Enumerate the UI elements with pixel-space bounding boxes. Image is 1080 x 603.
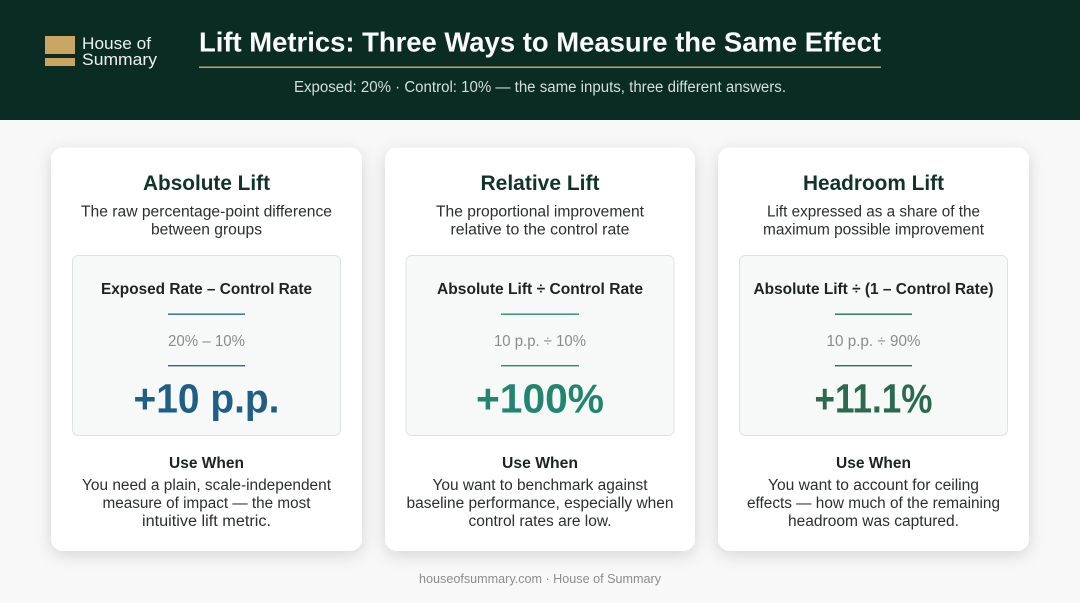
logo: House of xyxy=(82,34,151,53)
description: absolute lift: between groups xyxy=(151,222,262,238)
use when: relative lift: baseline performance, especially when xyxy=(406,495,674,512)
formula box: headroom lift: +11.1% xyxy=(814,376,932,422)
formula box: relative lift xyxy=(406,256,674,436)
header band xyxy=(0,0,1080,120)
description: headroom lift xyxy=(763,204,985,238)
footer: houseofsummary.com · House of Summary xyxy=(419,572,662,586)
use when: relative lift: control rates are low. xyxy=(468,513,612,530)
title: Lift Metrics: Three Ways to Measure the Same Effect xyxy=(199,26,881,58)
logo xyxy=(45,34,158,69)
use when: absolute lift: You need a plain, scale-independent xyxy=(82,477,332,494)
panel: relative lift xyxy=(385,148,695,551)
description: headroom lift: Lift expressed as a share of the xyxy=(767,204,980,220)
panel: absolute lift xyxy=(51,148,362,551)
heading: absolute lift: Absolute Lift xyxy=(143,172,270,195)
description: absolute lift: The raw percentage-point difference xyxy=(81,204,332,220)
use when: relative lift: Use When xyxy=(502,455,578,472)
formula box: absolute lift: 20% – 10% xyxy=(168,333,245,350)
use when: headroom lift: You want to account for ceiling xyxy=(768,477,979,494)
description: relative lift: The proportional improvement xyxy=(436,204,645,220)
formula box: relative lift: Absolute Lift ÷ Control Rate xyxy=(437,281,643,298)
formula box: headroom lift: Absolute Lift ÷ (1 – Control Rate) xyxy=(754,281,994,298)
use when: absolute lift: measure of impact — the most xyxy=(102,495,311,512)
heading: headroom lift: Headroom Lift xyxy=(803,172,944,195)
formula box: headroom lift xyxy=(740,256,1008,436)
use when: headroom lift: headroom was captured. xyxy=(788,513,959,530)
formula box: absolute lift: Exposed Rate – Control Rate xyxy=(101,281,312,298)
description: relative lift xyxy=(436,204,645,238)
description: absolute lift xyxy=(81,204,332,238)
use when: absolute lift: Use When xyxy=(169,455,244,472)
use when: headroom lift: effects — how much of the remaining xyxy=(747,495,1000,512)
heading: relative lift: Relative Lift xyxy=(480,172,600,195)
formula box: headroom lift: 10 p.p. ÷ 90% xyxy=(826,333,921,350)
use when: relative lift: You want to benchmark against xyxy=(432,477,648,494)
logo: Summary xyxy=(82,50,158,69)
use when: relative lift xyxy=(406,455,674,530)
formula box: relative lift: +100% xyxy=(476,376,604,422)
subtitle: Exposed: 20% · Control: 10% — the same inputs, three different answers. xyxy=(294,79,786,96)
use when: absolute lift: intuitive lift metric. xyxy=(142,513,271,530)
formula box: absolute lift: +10 p.p. xyxy=(134,376,280,422)
use when: headroom lift: Use When xyxy=(836,455,911,472)
use when: headroom lift xyxy=(747,455,1000,530)
description: headroom lift: maximum possible improvement xyxy=(763,222,985,238)
formula box: absolute lift xyxy=(72,256,340,436)
use when: absolute lift xyxy=(82,455,332,530)
title underline xyxy=(199,66,881,68)
formula box: relative lift: 10 p.p. ÷ 10% xyxy=(494,333,586,350)
description: relative lift: relative to the control rate xyxy=(450,222,630,238)
panel: headroom lift xyxy=(718,148,1029,551)
